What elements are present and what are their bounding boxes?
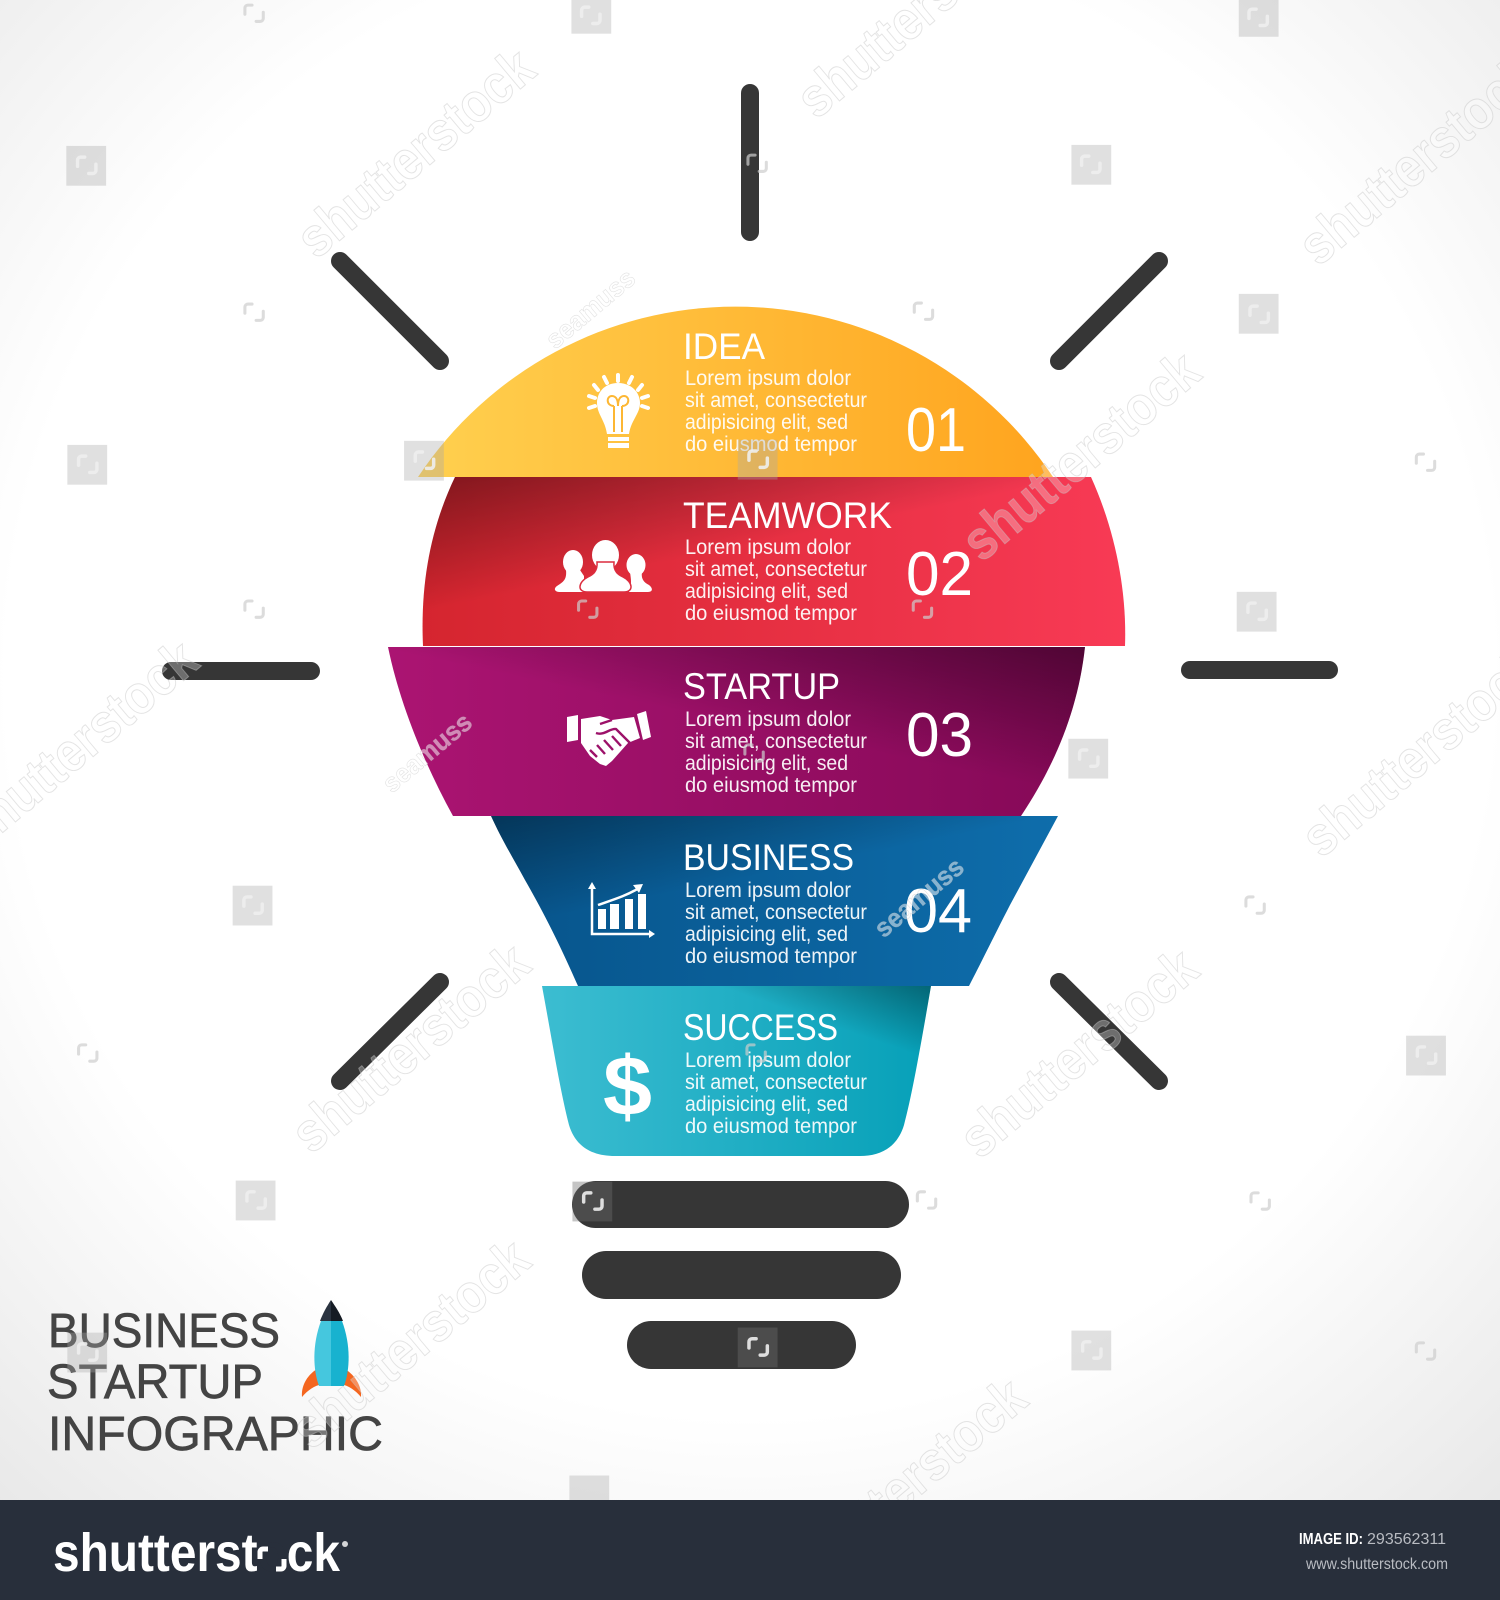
description: idea (685, 367, 867, 456)
image id (1299, 1531, 1446, 1548)
segment 02: teamwork (423, 477, 1125, 646)
number 04: 04 (904, 877, 972, 946)
shutterstock logo: shutterstock (53, 1523, 341, 1583)
icon: handshake (567, 711, 651, 766)
icon: dollar sign: $ (603, 1039, 652, 1133)
title: business startup infographic (47, 1305, 383, 1461)
segment 03: startup (388, 647, 1085, 816)
number 01: 01 (906, 396, 966, 465)
description: startup: Lorem ipsum dolor (685, 708, 851, 731)
description: idea: do eiusmod tempor (685, 433, 857, 456)
watermark overlay: shutterstock (279, 930, 541, 1164)
description: success: adipisicing elit, sed (685, 1093, 848, 1116)
segment 01: idea (418, 307, 1053, 477)
icon: light bulb (589, 375, 648, 448)
description: business: sit amet, consectetur (685, 901, 867, 924)
heading: startup: STARTUP (683, 666, 840, 707)
description: success: Lorem ipsum dolor (685, 1049, 851, 1072)
watermark overlay: seamuss (868, 852, 970, 943)
description: success (685, 1049, 867, 1138)
segment 05: success (542, 986, 931, 1156)
description: business: adipisicing elit, sed (685, 923, 848, 946)
icon: growth chart (588, 882, 655, 938)
image id: IMAGE ID: (1299, 1531, 1363, 1548)
icon: rocket (302, 1300, 361, 1397)
description: success: do eiusmod tempor (685, 1115, 857, 1138)
watermark overlay: shutterstock (949, 338, 1212, 572)
description: startup: sit amet, consectetur (685, 730, 867, 753)
watermark overlay: shutterstock (776, 1365, 1038, 1599)
description: teamwork: adipisicing elit, sed (685, 580, 848, 603)
watermark overlay: shutterstock (279, 1226, 541, 1460)
watermark overlay: shutterstock (947, 935, 1210, 1169)
description: teamwork: do eiusmod tempor (685, 602, 857, 625)
description: teamwork: Lorem ipsum dolor (685, 536, 851, 559)
title: business startup infographic: BUSINESS (48, 1305, 280, 1358)
description: idea: adipisicing elit, sed (685, 411, 848, 434)
watermark overlay: seamuss (540, 263, 641, 355)
website: www.shutterstock.com (1305, 1556, 1448, 1573)
description: startup (685, 708, 867, 797)
title: business startup infographic: STARTUP (47, 1356, 263, 1409)
description: teamwork (685, 536, 867, 625)
watermark overlay: shutterstock (284, 35, 546, 269)
description: startup: adipisicing elit, sed (685, 752, 848, 775)
number 02: 02 (906, 540, 973, 609)
description: business (685, 879, 867, 968)
segment 04: business (491, 816, 1058, 986)
title: business startup infographic: INFOGRAPHIC (48, 1408, 383, 1461)
heading: idea: IDEA (683, 326, 765, 367)
watermark overlay: seamuss (376, 707, 478, 798)
icon: people (555, 540, 652, 592)
heading: teamwork: TEAMWORK (683, 495, 892, 536)
description: success: sit amet, consectetur (685, 1071, 867, 1094)
description: startup: do eiusmod tempor (685, 774, 857, 797)
description: business: do eiusmod tempor (685, 945, 857, 968)
bulb base (572, 1181, 909, 1369)
description: teamwork: sit amet, consectetur (685, 558, 867, 581)
description: business: Lorem ipsum dolor (685, 879, 851, 902)
description: idea: Lorem ipsum dolor (685, 367, 851, 390)
number 03: 03 (906, 701, 973, 770)
footer bar (0, 1500, 1500, 1600)
heading: success: SUCCESS (683, 1007, 838, 1048)
heading: business: BUSINESS (683, 837, 854, 878)
light rays (171, 93, 1329, 1081)
description: idea: sit amet, consectetur (685, 389, 867, 412)
image id: 293562311 (1367, 1531, 1446, 1548)
